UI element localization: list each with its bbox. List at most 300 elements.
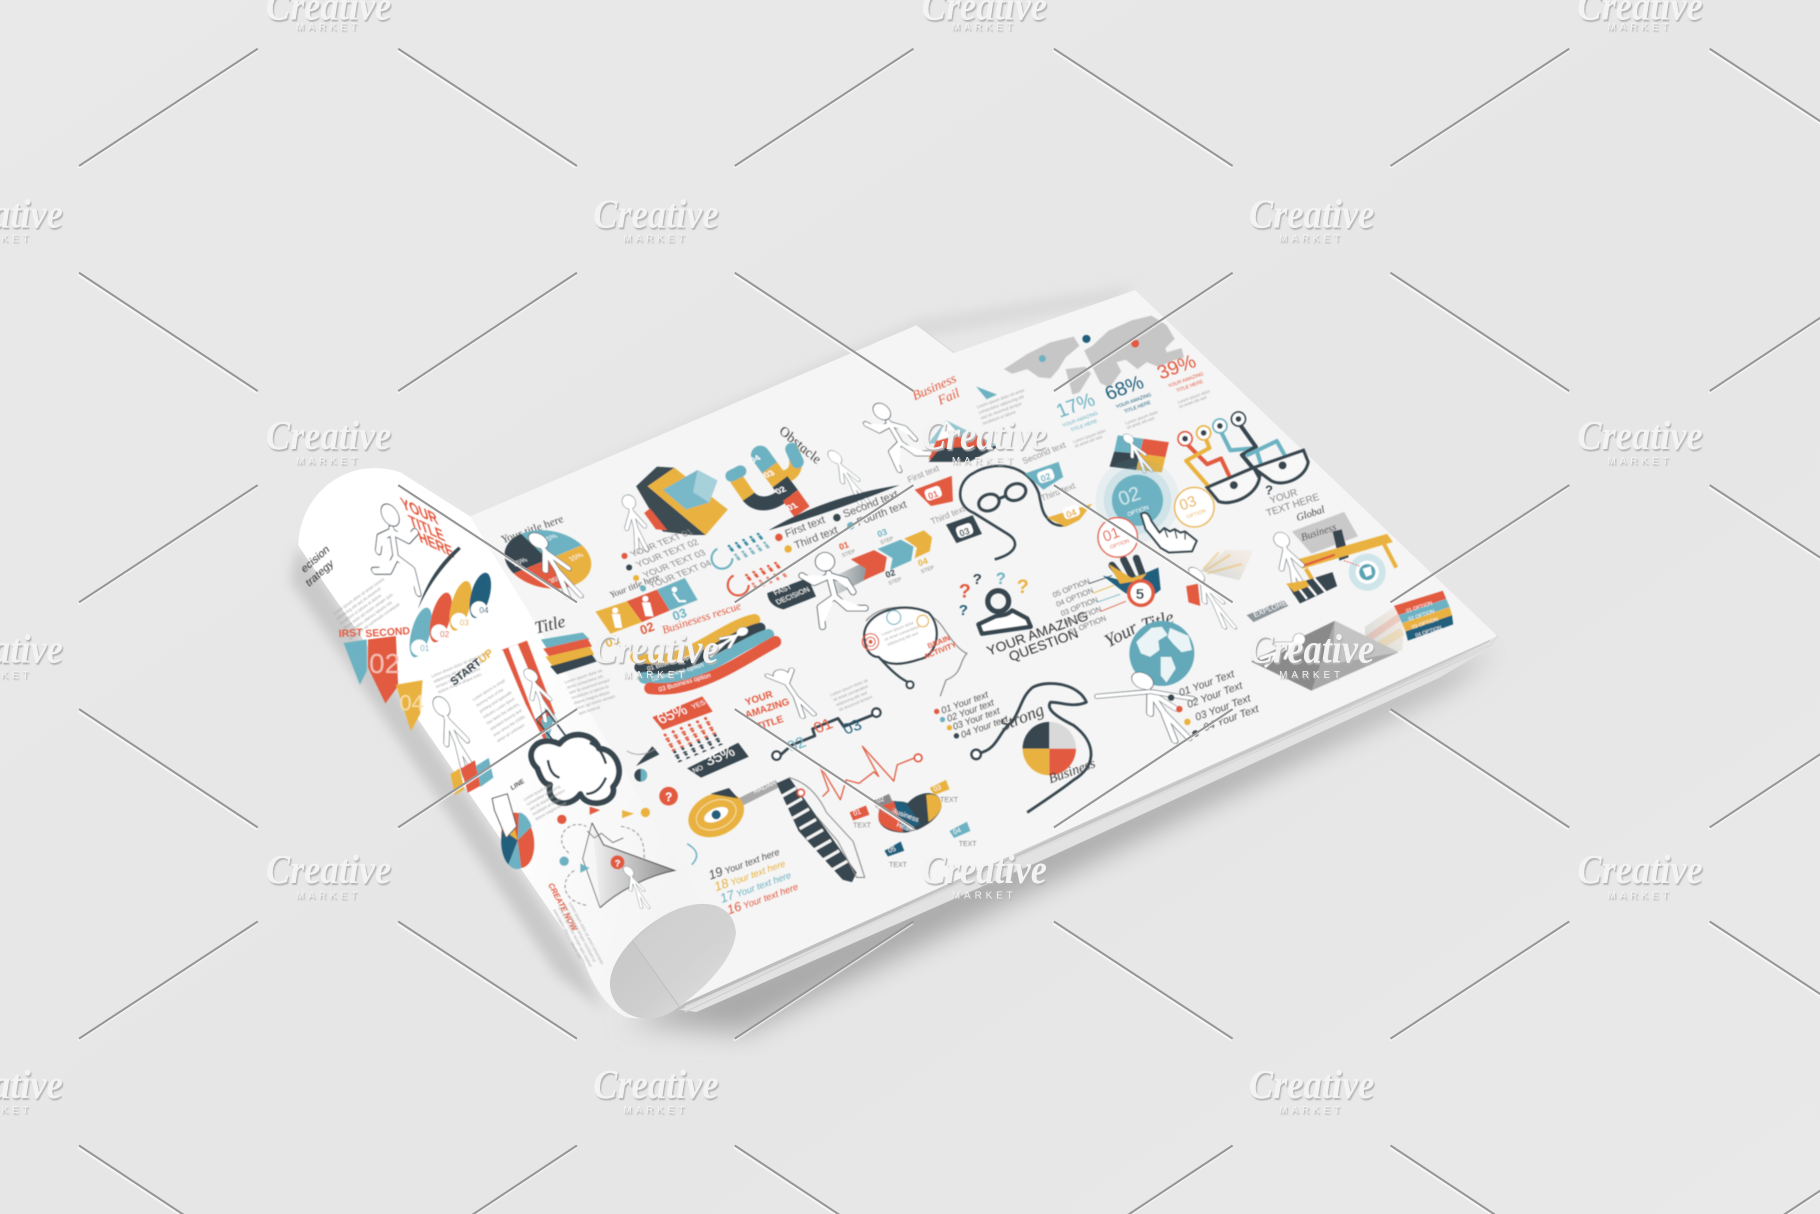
pie chart: 25% bbox=[512, 557, 529, 567]
panel: your amazing question: YOUR AMAZING bbox=[985, 608, 1090, 658]
chart: 65 percent yes 35 percent no bbox=[652, 696, 749, 778]
panel: podium and person: sit amet consectetur bbox=[832, 684, 870, 702]
tab 01 bbox=[906, 463, 953, 506]
panel: person tiles 01 02 03: 02 bbox=[638, 619, 656, 638]
panel: rolled page blobs 01-04: Lorem ipsum dolor sit amet consec bbox=[430, 650, 490, 679]
label chips: 05 bbox=[887, 846, 897, 855]
small marks beside the cloud: ? bbox=[665, 791, 672, 804]
label chips: 01 bbox=[853, 809, 862, 818]
panel: podium and person: adipiscing elit sed bbox=[835, 690, 869, 707]
panel: winged pie on rolled page: dolore magna aliqua bbox=[534, 800, 568, 821]
stat: 68 percent bbox=[1102, 372, 1161, 430]
panel: business fail pyramid: incididunt ut labore bbox=[982, 409, 1017, 426]
icon: person at base bbox=[621, 868, 651, 907]
panel: your title globe and person bbox=[1097, 607, 1261, 742]
option 02 bbox=[1096, 458, 1179, 542]
legend: your text list bbox=[621, 527, 713, 591]
red heading and body text bbox=[546, 882, 606, 973]
panel: your amazing question bbox=[959, 570, 1090, 664]
panel: obstacle cactus: 03 bbox=[761, 468, 777, 480]
watermarks: MARKET bbox=[1279, 233, 1344, 244]
chevron steps: STEP bbox=[880, 536, 895, 546]
panel: business fail pyramid: sed do eiusmod tempor bbox=[980, 401, 1023, 420]
label chips: TEXT bbox=[878, 809, 896, 816]
icon: kicking person bbox=[860, 406, 936, 470]
panel: mountain: ? bbox=[615, 858, 621, 868]
panel: decision strategy: aliquip ex ea commodo consequat bbox=[348, 601, 401, 641]
pill label: DECISION bbox=[774, 585, 812, 606]
panel: glasses with pipes bbox=[1178, 412, 1321, 519]
panel: brain activity: sit amet consectetur bbox=[883, 624, 921, 642]
tab 04: 04 bbox=[1065, 507, 1079, 520]
legend: obstacle texts bbox=[775, 489, 910, 553]
icon: dancing person bbox=[353, 507, 436, 593]
watermarks: MARKET bbox=[952, 22, 1017, 33]
label chips: 04 bbox=[952, 827, 962, 836]
watermarks: Creative bbox=[266, 847, 391, 893]
label chips: 03 bbox=[933, 784, 942, 793]
icon: hand: 5 bbox=[1136, 586, 1144, 603]
panel: person tiles 01 02 03: 03 bbox=[670, 605, 689, 624]
panel: five options hand: 05 OPTION bbox=[1051, 576, 1091, 600]
icon: cloud bbox=[531, 710, 619, 803]
tab 04: Third text bbox=[1039, 480, 1077, 503]
panel: head with glasses and tabs bbox=[906, 439, 1092, 559]
panel: business fail pyramid bbox=[860, 370, 1032, 470]
chart: 65 percent yes 35 percent no: 35% bbox=[702, 743, 738, 769]
watermarks: Creative bbox=[593, 1062, 718, 1108]
panel: startup: industry Lorem Ipsum bbox=[482, 695, 517, 720]
swoosh divider bbox=[768, 485, 900, 530]
pie chart: 15% bbox=[568, 552, 585, 563]
tab 03: Third text bbox=[929, 503, 967, 526]
panel: global business desk: Global bbox=[1295, 505, 1326, 524]
panel: startup: has been the industry bbox=[485, 701, 520, 726]
panel: rolled page blobs 01-04: 03 bbox=[460, 619, 469, 628]
watermarks: MARKET bbox=[296, 456, 361, 467]
panel: your amazing question: ? bbox=[1017, 576, 1029, 598]
panel: title stack: enim ad minim veniam bbox=[575, 693, 617, 711]
panel: business fail pyramid: Fail bbox=[934, 385, 962, 408]
world map bbox=[1004, 316, 1184, 395]
icon: running man bbox=[802, 555, 865, 627]
panel: rolled page blobs 01-04: 01 bbox=[420, 644, 430, 653]
panel: startup: Lorem Ipsum is simply bbox=[472, 677, 507, 702]
panel: startup: dummy text of the bbox=[475, 686, 505, 708]
panel: five options hand: 01 OPTION bbox=[1068, 614, 1107, 637]
panel: startup: ever since the 1500s bbox=[492, 714, 526, 737]
panel: five options hand: 04 OPTION bbox=[1055, 586, 1095, 609]
chart: business health heart: Health bbox=[895, 822, 917, 835]
list: 19 18 17 16: 16 Your text here bbox=[725, 878, 800, 917]
icon: person with open arms bbox=[1097, 673, 1194, 742]
legend: your text list: YOUR TEXT 02 bbox=[634, 537, 701, 569]
icon: person bbox=[523, 534, 585, 597]
panel: winged pie on rolled page: sed do eiusmod tempor bbox=[528, 787, 566, 812]
panel: podium and person: do eiusmod tempor bbox=[838, 694, 874, 712]
panel: brain activity bbox=[862, 607, 967, 696]
stat: 39 percent: YOUR AMAZING bbox=[1167, 371, 1205, 390]
panel: five options hand bbox=[1051, 558, 1161, 637]
panel: podium and person: AMAZING bbox=[744, 696, 791, 721]
chart: business health heart bbox=[850, 780, 977, 869]
watermarks: MARKET bbox=[623, 1105, 688, 1116]
stat: 39 percent bbox=[1154, 351, 1213, 409]
panel: business fail pyramid: Business bbox=[910, 370, 958, 403]
legend: your text list: YOUR TEXT 01 bbox=[628, 527, 695, 559]
head outline bbox=[960, 466, 1074, 559]
tab 02 bbox=[1021, 439, 1068, 490]
panel: business rescue waves: 03 Business option bbox=[658, 672, 712, 694]
option 01: OPTION bbox=[1109, 538, 1130, 551]
panel: rolled page blobs 01-04: tempor incididunt ut labore bbox=[435, 666, 482, 689]
glasses bbox=[1207, 450, 1308, 503]
list: 19 18 17 16 bbox=[687, 843, 800, 917]
option 02: OPTION bbox=[1127, 505, 1150, 518]
panel: podium and person: 03 bbox=[840, 717, 865, 738]
watermarks: MARKET bbox=[623, 670, 688, 681]
list: 19 18 17 16: 17 Your text here bbox=[718, 866, 793, 906]
page artwork bbox=[300, 316, 1453, 973]
legend: your text four rows bbox=[934, 689, 1010, 740]
pie chart: 25% bbox=[542, 533, 559, 544]
legend: your text four rows: 01 Your text bbox=[940, 689, 990, 716]
icon: climbing person bbox=[520, 671, 559, 721]
panel: rolled page title: TITLE bbox=[407, 512, 447, 546]
panel: rolled page blobs 01-04: 02 bbox=[440, 630, 449, 639]
chart: business health heart: Business bbox=[891, 808, 920, 824]
panel: rolled page blobs 01-04: 04 bbox=[479, 606, 489, 615]
watermarks: Creative bbox=[593, 627, 718, 673]
icon: pointing hand bbox=[1141, 513, 1197, 552]
watermarks: MARKET bbox=[296, 22, 361, 33]
stat: 39 percent: sit amet elit sed bbox=[1178, 394, 1208, 409]
panel: your title globe and person: Your bbox=[1101, 617, 1142, 652]
icon: user bbox=[978, 591, 1031, 634]
panel: strong business bicep bbox=[972, 683, 1098, 812]
stat: 68 percent: Lorem ipsum dolor bbox=[1125, 409, 1159, 426]
chevron steps: 02 bbox=[884, 567, 897, 580]
panel: startup: standard dummy text bbox=[489, 707, 523, 731]
chevron steps: STEP bbox=[841, 548, 857, 559]
panel: title stack bbox=[532, 611, 621, 716]
panel: decision strategy: Lorem ipsum dolor sit amet consec bbox=[332, 576, 385, 616]
legend: your text list: YOUR TEXT 03 bbox=[641, 548, 708, 580]
legend: your text four rows: 03 Your text bbox=[951, 706, 1001, 732]
watermarks: MARKET bbox=[623, 233, 688, 244]
panel: person tiles 01 02 03: Your title here bbox=[608, 572, 661, 599]
icon: walking person bbox=[428, 698, 481, 777]
panel: first second blocks: 02 bbox=[369, 648, 400, 679]
heartbeat line bbox=[819, 746, 915, 800]
legend: obstacle texts: Second text bbox=[840, 489, 902, 520]
brochure sheets below the top page bbox=[679, 641, 1490, 1012]
panel: business rescue waves: 01 Business option bbox=[646, 651, 700, 673]
panel: your title globe and person: 01 Your Text bbox=[1178, 669, 1237, 699]
stat: 17 percent: YOUR AMAZING bbox=[1062, 411, 1099, 429]
panel: person tiles 01 02 03: 01 bbox=[603, 631, 621, 650]
option 03 bbox=[1175, 487, 1214, 527]
panel: five options hand: 02 OPTION bbox=[1063, 604, 1103, 627]
panel: business fail pyramid: consectetur adipiscing elit bbox=[978, 394, 1025, 415]
panel: brain activity: adipiscing elit sed bbox=[886, 630, 920, 647]
icon: person bbox=[824, 451, 872, 504]
red heading and body text: exercitation ullamco laboris nisi bbox=[552, 908, 583, 959]
panel: strong business bicep: Business bbox=[1047, 756, 1098, 787]
stat: 17 percent: 17% bbox=[1053, 389, 1098, 422]
panel: mountain bbox=[557, 807, 674, 908]
panel: rolled page blobs 01-04: adipiscing elit sed do eiusmod bbox=[433, 658, 484, 684]
panel: title stack: dolore magna aliqua bbox=[573, 689, 611, 705]
panel: title stack: incididunt ut labore et bbox=[571, 683, 610, 700]
tab 02: 02 bbox=[1039, 471, 1052, 484]
chart: 65 percent yes 35 percent no: 65% bbox=[654, 702, 691, 728]
panel: your title here pie: Your title here bbox=[499, 514, 566, 546]
panel: option stripes and origami: 04 OPTION bbox=[1415, 625, 1443, 639]
panel: option stripes and origami: 02 OPTION bbox=[1408, 609, 1436, 623]
panel: explorer: EXPLORE bbox=[1252, 598, 1288, 619]
chart: 65 percent yes 35 percent no: NO bbox=[692, 764, 705, 775]
option 01: 01 bbox=[1101, 524, 1122, 546]
panel: obstacle cactus: Obstacle bbox=[777, 422, 823, 469]
watermarks: Creative bbox=[266, 413, 391, 459]
panel: five options hand: 03 OPTION bbox=[1059, 595, 1099, 618]
panel: brain activity: BRAIN bbox=[926, 633, 951, 651]
panel: title stack: Lorem ipsum dolor sit bbox=[564, 668, 603, 685]
watermarks: Creative bbox=[922, 413, 1047, 459]
panel: title stack: sed do eiusmod tempor bbox=[568, 677, 611, 695]
panel: podium and person: YOUR bbox=[744, 689, 774, 709]
stat: 17 percent bbox=[1053, 389, 1108, 449]
panel: obstacle cactus: 04 bbox=[747, 453, 763, 465]
panel: glasses with pipes: TEXT HERE bbox=[1265, 492, 1321, 519]
panel: winged pie on rolled page: consectetur adipiscing bbox=[525, 784, 561, 807]
tab 03 bbox=[929, 503, 982, 543]
main open page and rolled page bbox=[298, 290, 1497, 1018]
panel: decision strategy bbox=[300, 543, 401, 641]
watermarks: MARKET bbox=[1279, 1105, 1344, 1116]
panel: winged pie on rolled page: Lorem ipsum dolor bbox=[523, 781, 553, 802]
panel: fast decision runner and steps bbox=[767, 526, 936, 627]
chart: radar eye bbox=[681, 779, 780, 846]
panel: your title globe and person: 04 Your Text bbox=[1202, 703, 1261, 734]
icon: seated person bbox=[1269, 533, 1311, 594]
stat: 68 percent: 68% bbox=[1102, 372, 1147, 405]
legend: obstacle texts: Third text bbox=[792, 524, 841, 552]
option 03: 03 bbox=[1177, 493, 1199, 514]
watermarks: MARKET bbox=[952, 890, 1017, 901]
label chips: TEXT bbox=[889, 862, 908, 869]
panel: your title here pie bbox=[487, 514, 609, 599]
panel: your amazing question: ? bbox=[996, 570, 1006, 588]
panel: options and pointing hand bbox=[1096, 458, 1214, 557]
pill label bbox=[767, 578, 816, 609]
watermarks: Creative bbox=[1577, 847, 1703, 893]
list: 19 18 17 16: 18 Your text here bbox=[712, 855, 787, 894]
panel: business rescue waves: 02 Business option bbox=[651, 661, 705, 683]
small marks beside the cloud bbox=[627, 746, 678, 805]
icon: person lying on waves bbox=[704, 625, 750, 658]
panel: obstacle cactus: 02 bbox=[773, 485, 788, 496]
tab 04 bbox=[1039, 480, 1092, 527]
stat: 68 percent: sit amet elit sed bbox=[1126, 415, 1156, 430]
panel: glasses with pipes: YOUR bbox=[1268, 487, 1299, 507]
stat: 68 percent: YOUR AMAZING bbox=[1115, 392, 1152, 410]
panel: startup: STARTUP bbox=[448, 647, 496, 688]
panel: winged pie on rolled page bbox=[450, 758, 606, 973]
panel: rolled page title bbox=[353, 495, 461, 609]
panel: person square bbox=[1110, 434, 1169, 472]
panel: explorer bbox=[1185, 550, 1288, 627]
panel: podium and person: 02 bbox=[784, 734, 809, 756]
panel: decision strategy: incididunt ut labore et dolore bbox=[338, 592, 383, 626]
striped ribbon bbox=[501, 641, 555, 743]
watermarks: Creative bbox=[1577, 413, 1703, 459]
tab 02: Second text bbox=[1021, 439, 1068, 466]
panel: decision strategy: ecision bbox=[300, 543, 331, 576]
panel: option stripes and origami bbox=[1251, 591, 1453, 691]
panel: your amazing question: ? bbox=[959, 581, 971, 603]
small tiles bbox=[450, 758, 493, 795]
watermarks: Creative bbox=[1249, 191, 1374, 237]
stat: 17 percent: TITLE HERE bbox=[1070, 418, 1099, 434]
legend: your text list: YOUR TEXT 04 bbox=[647, 558, 713, 590]
panel: global business desk: Business bbox=[1300, 522, 1338, 544]
icon: person arms up bbox=[767, 669, 820, 718]
icon: reclining person bbox=[1259, 630, 1307, 669]
panel: decision strategy: adipiscing elit sed do eiusmod bbox=[335, 586, 382, 621]
watermarks: MARKET bbox=[1608, 890, 1672, 901]
chevron steps: STEP bbox=[920, 565, 936, 575]
panel: glasses with pipes: ? bbox=[1265, 482, 1273, 497]
panel: winged pie on rolled page: incididunt ut labore bbox=[531, 796, 563, 817]
chevron steps: 01 bbox=[838, 539, 850, 552]
watermarks: Creative bbox=[1249, 627, 1374, 673]
icon: globe bbox=[1129, 621, 1194, 686]
option 01 bbox=[1098, 518, 1137, 557]
panel: strong business bicep: Strong bbox=[997, 699, 1047, 735]
label chips: 02 bbox=[876, 796, 886, 805]
panel: decision strategy: exercitation ullamco laboris nisi bbox=[345, 600, 393, 636]
panel: business rescue waves bbox=[636, 601, 775, 694]
icon: small globe bbox=[1349, 554, 1386, 591]
label chips: TEXT bbox=[959, 841, 977, 848]
panel: brain activity: Lorem ipsum dolor bbox=[880, 620, 915, 637]
dark curve bbox=[418, 547, 461, 609]
panel: pushed block bbox=[619, 467, 728, 552]
label chips: TEXT bbox=[940, 797, 959, 804]
chart: radar eye: RADAR bbox=[752, 779, 778, 796]
watermarks: MARKET bbox=[1608, 22, 1672, 33]
pie chart bbox=[487, 520, 609, 599]
panel: brain activity: ACTIVITY bbox=[922, 640, 958, 661]
list: 19 18 17 16: 19 Your text here bbox=[706, 843, 781, 883]
watermarks: Creative bbox=[922, 847, 1047, 893]
watermarks: MARKET bbox=[1279, 670, 1344, 681]
pill label: FAST bbox=[771, 582, 794, 597]
panel: rolled page title: HERE bbox=[416, 528, 456, 562]
red heading and body text: CREATE NOW bbox=[546, 882, 580, 932]
rolled page opening bbox=[610, 904, 736, 1019]
panel: your title globe and person: 03 Your Text bbox=[1194, 693, 1253, 724]
option 02: 02 bbox=[1115, 483, 1144, 511]
pie chart: 35% bbox=[548, 574, 566, 585]
stat: 17 percent: Lorem ipsum dolor bbox=[1072, 428, 1107, 444]
panel: podium and person: 01 bbox=[811, 716, 836, 737]
legend: obstacle texts: Fourth text bbox=[854, 499, 910, 528]
label chips bbox=[850, 780, 977, 869]
tab 03: 03 bbox=[958, 526, 971, 539]
legend: obstacle texts: First text bbox=[782, 514, 829, 540]
panel: first second blocks: IRST bbox=[338, 627, 364, 640]
stat: 39 percent: TITLE HERE bbox=[1176, 379, 1205, 394]
panel: global business desk bbox=[1269, 505, 1396, 604]
panel: first second blocks: SECOND bbox=[365, 626, 411, 640]
icon: person pushing bbox=[619, 496, 651, 552]
panel: your amazing question: QUESTION bbox=[1007, 626, 1080, 664]
panel: title stack: quis nostrud bbox=[578, 704, 601, 716]
tab 01: First text bbox=[906, 463, 941, 485]
option 03: OPTION bbox=[1186, 508, 1207, 521]
panel: first second blocks bbox=[338, 626, 424, 731]
panel: winged pie on rolled page: LINE bbox=[510, 778, 526, 792]
icon: explorer person bbox=[1185, 570, 1238, 627]
panel: person tiles 01 02 03 bbox=[595, 572, 698, 650]
panel: business fail pyramid: Lorem ipsum dolor sit amet bbox=[976, 387, 1026, 409]
stat: 39 percent: 39% bbox=[1154, 351, 1199, 384]
watermarks: MARKET bbox=[952, 456, 1017, 467]
panel: business rescue waves: Businesess rescue bbox=[660, 601, 743, 636]
legend: your text four rows: 02 Your text bbox=[946, 697, 996, 724]
panel: rolled page blobs 01-04: dolore magna aliqua enim bbox=[437, 671, 483, 694]
red heading and body text: ut enim ad minim veniam quis nostrud bbox=[557, 906, 594, 968]
chevron steps bbox=[826, 526, 936, 594]
watermarks: MARKET bbox=[1608, 456, 1672, 467]
panel: title stack: Title bbox=[532, 611, 568, 638]
panel: startup: when an unknown bbox=[496, 722, 525, 743]
panel: rolled page title: YOUR bbox=[398, 495, 440, 529]
label chips: TEXT bbox=[853, 823, 872, 830]
panel: your amazing question: ? bbox=[973, 571, 982, 588]
panel: podium and person: Lorem ipsum dolor sit bbox=[829, 678, 869, 697]
panel: your title globe and person: 02 Your Text bbox=[1186, 680, 1245, 711]
panel: your amazing question: ? bbox=[959, 602, 968, 619]
panel: option stripes and origami: 01 OPTION bbox=[1406, 601, 1434, 615]
panel: obstacle cactus bbox=[731, 422, 900, 530]
panel: podium and person: TITLE bbox=[755, 714, 785, 733]
chevron steps: STEP bbox=[888, 576, 903, 587]
tab 01: 01 bbox=[927, 489, 940, 501]
panel: decision strategy: trategy bbox=[304, 557, 336, 590]
panel: obstacle cactus: 01 bbox=[784, 501, 800, 512]
watermarks: Creative bbox=[593, 191, 718, 237]
panel: startup bbox=[428, 641, 559, 777]
panel: podium and person bbox=[744, 669, 881, 760]
stat: 39 percent: Lorem ipsum dolor bbox=[1177, 388, 1211, 405]
panel: title stack: amet consectetur elit bbox=[566, 673, 605, 690]
panel: rolled page blobs 01-04 bbox=[405, 571, 497, 694]
pie chart bbox=[1023, 722, 1076, 775]
chart: 65 percent yes 35 percent no: YES bbox=[690, 699, 707, 711]
glasses bbox=[976, 481, 1028, 514]
map pins bbox=[1039, 335, 1139, 362]
chevron steps: 03 bbox=[876, 526, 889, 539]
stat: 17 percent: sit amet elit sed bbox=[1074, 434, 1103, 449]
panel: startup: printing and typesetting bbox=[479, 688, 516, 714]
chevron steps: 04 bbox=[917, 555, 929, 568]
watermarks: MARKET bbox=[296, 890, 361, 901]
red heading and body text: Lorem ipsum dolor sit amet consectetur bbox=[568, 901, 606, 966]
